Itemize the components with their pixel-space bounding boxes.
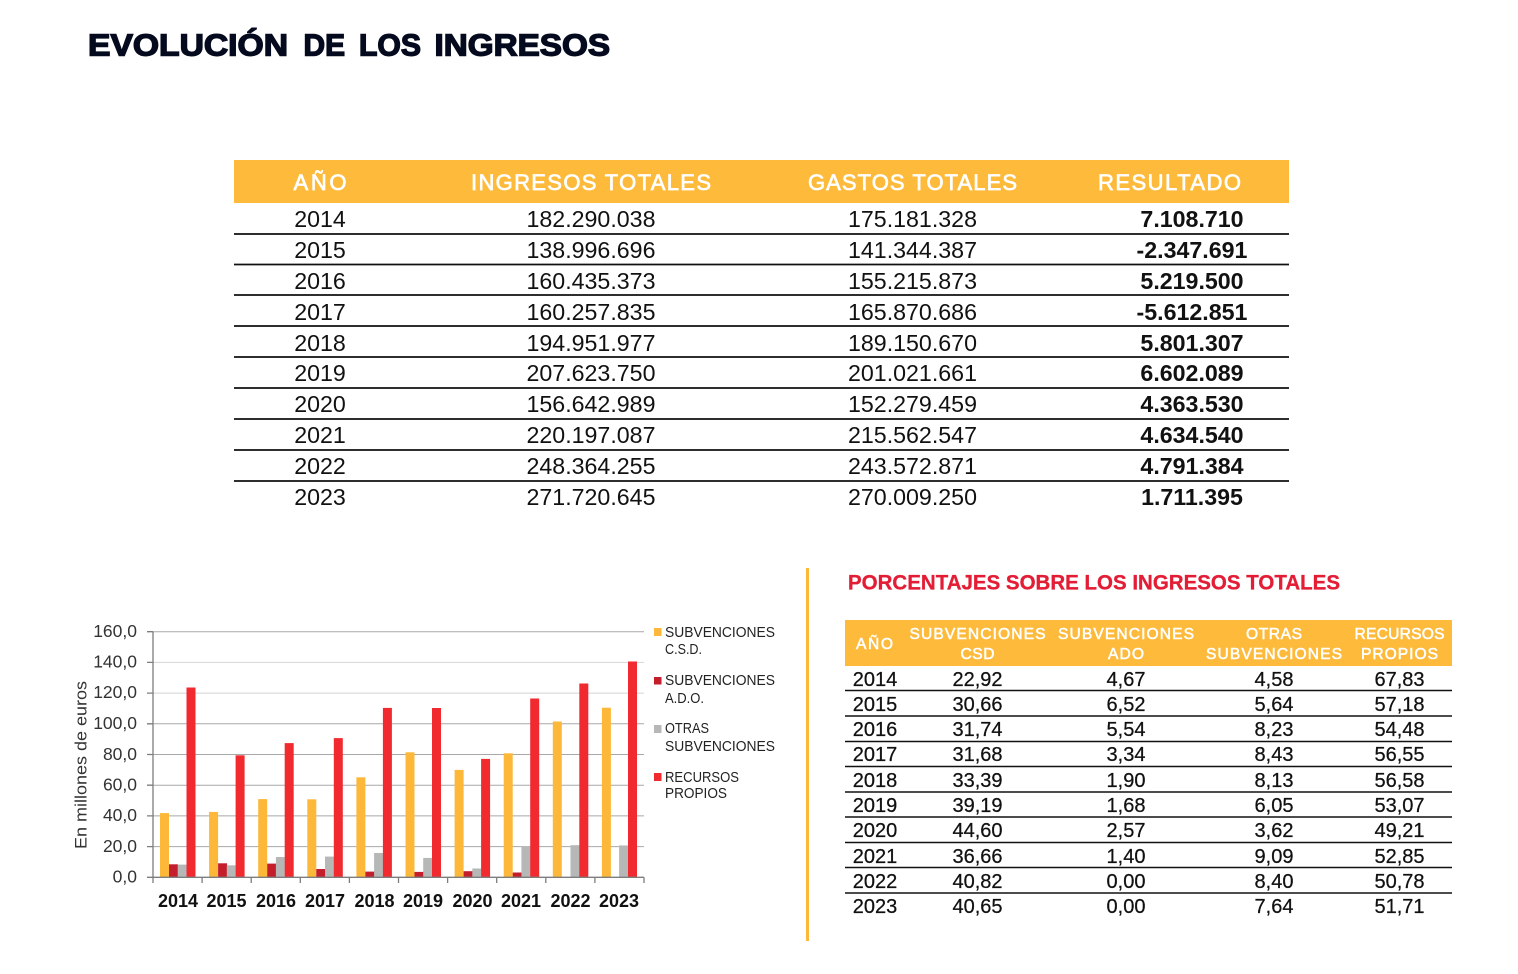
legend: PROPIOS [665, 786, 727, 802]
panel: main results table [234, 160, 1289, 510]
vertical divider [806, 568, 809, 941]
percent row 2022: 50,78 [1374, 871, 1425, 893]
x axis labels: 2021 [501, 891, 541, 911]
series: recursos propios [186, 662, 637, 877]
x axis labels: 2020 [452, 891, 493, 911]
percent row 2015: 30,66 [952, 694, 1003, 716]
x axis labels [158, 891, 639, 911]
row 2018 [294, 330, 1244, 356]
row 2016 [294, 268, 1244, 294]
row 2018: 2018 [294, 330, 346, 356]
percent row 2015: 2015 [853, 694, 897, 716]
percent table header: RECURSOS [1354, 626, 1444, 643]
x axis labels: 2019 [403, 891, 443, 911]
row 2021: 220.197.087 [527, 422, 655, 448]
percent row 2016: 8,23 [1255, 719, 1293, 741]
percent row 2021: 9,09 [1255, 846, 1293, 868]
row 2017: -5.612.851 [1137, 299, 1248, 325]
percent row 2017: 3,34 [1107, 744, 1145, 766]
row 2018: 194.951.977 [527, 330, 655, 356]
percent row 2019: 6,05 [1255, 795, 1293, 817]
x axis labels: 2014 [158, 891, 198, 911]
row 2021 [294, 422, 1244, 448]
x axis labels: 2022 [550, 891, 591, 911]
panel: bar chart [72, 621, 775, 911]
percent row 2022: 2022 [853, 871, 897, 893]
row 2019: 6.602.089 [1140, 360, 1244, 386]
percent row 2021: 1,40 [1107, 846, 1145, 868]
percent row 2020: 3,62 [1255, 820, 1293, 842]
x axis labels: 2017 [305, 891, 345, 911]
percent table header: AÑO [856, 633, 893, 653]
row 2020 [294, 391, 1244, 417]
percent row 2023: 7,64 [1255, 896, 1293, 918]
legend: SUBVENCIONES [665, 625, 775, 641]
row 2021: 215.562.547 [848, 422, 977, 448]
percent row 2016: 2016 [853, 719, 897, 741]
percent row 2021: 2021 [853, 846, 897, 868]
percent row 2014: 2014 [853, 669, 897, 691]
row 2016: 2016 [294, 268, 346, 294]
legend: RECURSOS [665, 770, 739, 786]
row 2015: -2.347.691 [1137, 237, 1248, 263]
axes [147, 632, 644, 883]
row 2021: 4.634.540 [1140, 422, 1244, 448]
y axis labels: 40,0 [103, 805, 137, 825]
percent row 2014 [853, 669, 1425, 691]
y axis title: En millones de euros [72, 681, 90, 849]
row 2018: 5.801.307 [1140, 330, 1244, 356]
title [88, 26, 610, 62]
series: otras subvenciones [178, 845, 628, 877]
percent row 2018: 2018 [853, 770, 897, 792]
percent row 2020: 49,21 [1374, 820, 1425, 842]
percent row 2023 [853, 896, 1425, 918]
legend: A.D.O. [665, 691, 704, 707]
percent table header: SUBVENCIONES [910, 626, 1046, 643]
percent row 2016: 54,48 [1374, 719, 1425, 741]
percent row 2014: 4,58 [1255, 669, 1293, 691]
row 2017: 160.257.835 [527, 299, 655, 325]
percent row 2014: 67,83 [1374, 669, 1425, 691]
percent row 2020 [853, 820, 1425, 842]
table header: RESULTADO [1098, 170, 1241, 195]
y axis labels: 0,0 [113, 866, 137, 886]
percent row 2017: 2017 [853, 744, 897, 766]
percent row 2023: 2023 [853, 896, 897, 918]
legend: SUBVENCIONES [665, 739, 775, 755]
percent row 2019: 1,68 [1107, 795, 1145, 817]
row 2021: 2021 [294, 422, 346, 448]
legend [654, 625, 775, 802]
x axis labels: 2016 [256, 891, 296, 911]
row 2022: 243.572.871 [848, 453, 977, 479]
row 2017: 2017 [294, 299, 346, 325]
y axis labels: 60,0 [103, 774, 137, 794]
percent row 2018 [853, 770, 1425, 792]
row 2019 [294, 360, 1244, 386]
row 2023: 1.711.395 [1141, 484, 1243, 510]
percent table header: SUBVENCIONES [1206, 646, 1342, 663]
series: subvenciones C.S.D. [160, 708, 611, 877]
percent row 2023: 0,00 [1107, 896, 1145, 918]
row 2020: 2020 [294, 391, 346, 417]
percent table header: PROPIOS [1361, 646, 1438, 663]
title: EVOLUCIÓN [88, 26, 288, 62]
percent row 2016: 5,54 [1107, 719, 1145, 741]
row 2014 [294, 206, 1244, 232]
row 2020: 152.279.459 [848, 391, 977, 417]
row 2014: 2014 [294, 206, 346, 232]
row 2019: 201.021.661 [848, 360, 977, 386]
percent row 2021 [853, 846, 1425, 868]
percent row 2022 [853, 871, 1425, 893]
row 2022: 2022 [294, 453, 346, 479]
table header: INGRESOS TOTALES [471, 170, 711, 195]
row 2017 [294, 299, 1248, 325]
percent row 2019 [853, 795, 1425, 817]
percent row 2022: 40,82 [952, 871, 1003, 893]
percent row 2015: 5,64 [1255, 694, 1293, 716]
percent row 2017: 56,55 [1374, 744, 1425, 766]
row 2014: 182.290.038 [527, 206, 655, 232]
table header: GASTOS TOTALES [808, 170, 1017, 195]
table header: AÑO [294, 170, 346, 195]
percent row 2020: 2020 [853, 820, 897, 842]
row 2020: 156.642.989 [527, 391, 655, 417]
percent table header: SUBVENCIONES [1058, 626, 1194, 643]
y axis labels: 80,0 [103, 744, 137, 764]
row 2014: 175.181.328 [848, 206, 977, 232]
row 2018: 189.150.670 [848, 330, 977, 356]
row 2019: 2019 [294, 360, 346, 386]
percent row 2018: 1,90 [1107, 770, 1145, 792]
row 2022: 248.364.255 [527, 453, 655, 479]
table rows [294, 206, 1248, 510]
series: subvenciones A.D.O. [169, 863, 522, 877]
percent row 2019: 53,07 [1374, 795, 1425, 817]
percent row 2022: 0,00 [1107, 871, 1145, 893]
row 2019: 207.623.750 [527, 360, 655, 386]
percent row 2022: 8,40 [1255, 871, 1293, 893]
percent row 2015 [853, 694, 1425, 716]
row 2023: 2023 [294, 484, 346, 510]
percent row 2015: 6,52 [1107, 694, 1145, 716]
x axis labels: 2023 [599, 891, 639, 911]
panel: percentages table [845, 620, 1452, 918]
percent table header: OTRAS [1246, 626, 1302, 643]
x axis labels: 2015 [206, 891, 247, 911]
row 2016: 160.435.373 [527, 268, 655, 294]
percent row 2020: 44,60 [952, 820, 1003, 842]
percent row 2020: 2,57 [1107, 820, 1145, 842]
x axis labels: 2018 [354, 891, 395, 911]
y axis labels: 120,0 [93, 682, 137, 702]
row 2017: 165.870.686 [848, 299, 977, 325]
percent row 2023: 51,71 [1374, 896, 1425, 918]
row 2015 [294, 237, 1248, 263]
row 2023 [294, 484, 1243, 510]
percent row 2014: 4,67 [1107, 669, 1145, 691]
percent row 2018: 33,39 [952, 770, 1003, 792]
row 2014: 7.108.710 [1140, 206, 1244, 232]
y axis labels: 140,0 [93, 652, 137, 672]
legend: SUBVENCIONES [665, 673, 775, 689]
percent row 2018: 56,58 [1374, 770, 1425, 792]
y axis labels: 160,0 [93, 621, 137, 641]
row 2015: 2015 [294, 237, 346, 263]
row 2015: 138.996.696 [527, 237, 655, 263]
row 2015: 141.344.387 [848, 237, 977, 263]
percent row 2019: 39,19 [952, 795, 1003, 817]
title: INGRESOS [434, 28, 610, 62]
y axis labels: 100,0 [93, 713, 137, 733]
percent row 2018: 8,13 [1255, 770, 1293, 792]
percent row 2023: 40,65 [952, 896, 1003, 918]
percent table header [845, 620, 1452, 666]
percent row 2016: 31,74 [952, 719, 1003, 741]
percent row 2017 [853, 744, 1425, 766]
row 2016: 5.219.500 [1140, 268, 1244, 294]
table header [234, 160, 1289, 203]
percent row 2016 [853, 719, 1425, 741]
percent table header: ADO [1108, 646, 1144, 663]
percent row 2021: 36,66 [952, 846, 1003, 868]
row 2023: 270.009.250 [848, 484, 977, 510]
percent table heading: PORCENTAJES SOBRE LOS INGRESOS TOTALES [848, 572, 1340, 594]
legend: C.S.D. [665, 642, 702, 658]
percent row 2019: 2019 [853, 795, 897, 817]
y axis labels: 20,0 [103, 836, 137, 856]
percent row 2014: 22,92 [952, 669, 1003, 691]
y axis labels [93, 621, 137, 886]
legend: OTRAS [665, 721, 709, 737]
row 2022 [294, 453, 1244, 479]
percent table header: CSD [960, 646, 994, 663]
row 2023: 271.720.645 [527, 484, 655, 510]
percent row 2017: 8,43 [1255, 744, 1293, 766]
title: DE [304, 28, 345, 62]
title: LOS [359, 28, 421, 62]
row 2016: 155.215.873 [848, 268, 977, 294]
percent row 2017: 31,68 [952, 744, 1003, 766]
percent row 2021: 52,85 [1374, 846, 1425, 868]
percent row 2015: 57,18 [1374, 694, 1425, 716]
row 2022: 4.791.384 [1140, 453, 1244, 479]
percent rows [853, 669, 1425, 918]
row 2020: 4.363.530 [1140, 391, 1244, 417]
